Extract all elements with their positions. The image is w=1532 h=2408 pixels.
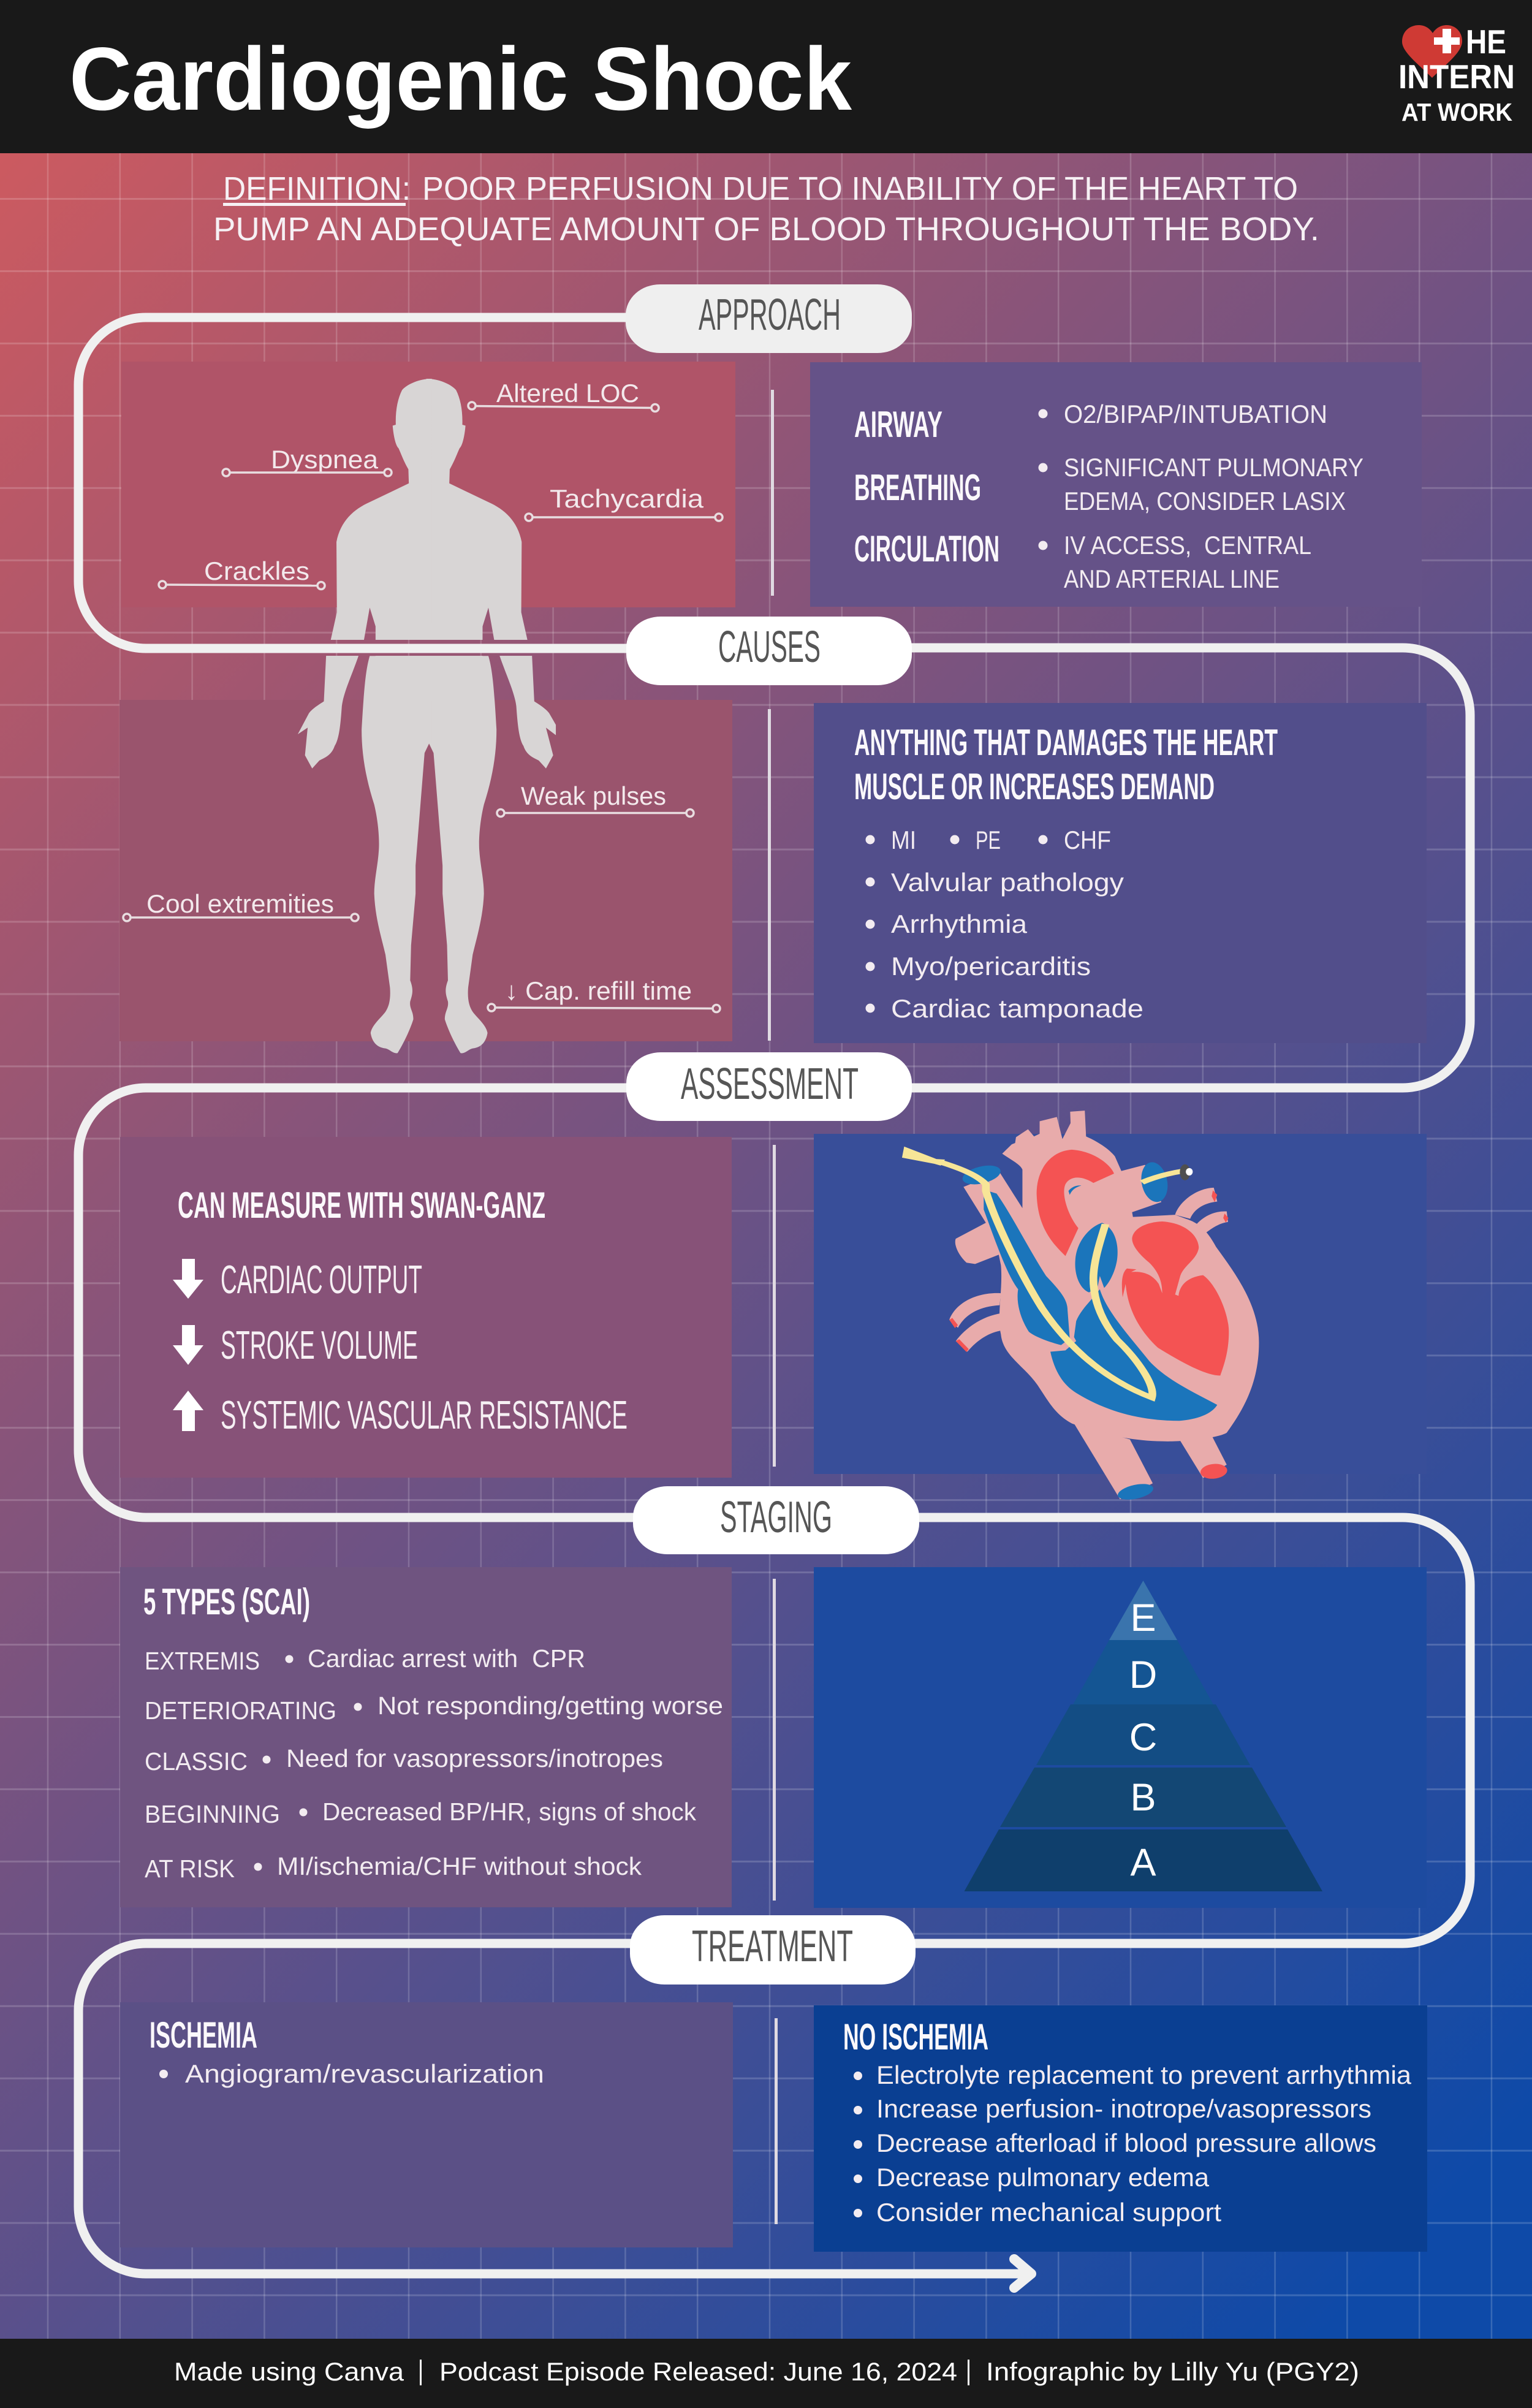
logo: The Intern at Work: HE: [1466, 23, 1506, 61]
text block: swan-ganz assessment: CAN MEASURE WITH SWAN-GANZ: [178, 1185, 545, 1226]
text block: causes list: Cardiac tamponade: [891, 994, 1143, 1023]
panel: assessment text background: [120, 1137, 732, 1478]
heading pill: approach: [626, 284, 912, 353]
text block: SCAI stages: AT RISK: [145, 1855, 235, 1883]
text block: SCAI stages: MI/ischemia/CHF without shock: [277, 1852, 642, 1880]
panel: staging text background: [120, 1567, 732, 1907]
label: Cool extremities: Cool extremities: [146, 889, 334, 918]
text block: causes list: Myo/pericarditis: [891, 952, 1091, 981]
text block: causes list: PE: [976, 826, 1001, 854]
label: Weak pulses: Weak pulses: [521, 781, 666, 810]
panel: assessment heart background: [814, 1134, 1427, 1474]
label: decreased cap refill time: ↓ Cap. refill time: [505, 976, 692, 1005]
pyramid tier C: C: [1129, 1716, 1157, 1759]
heading pill: causes: CAUSES: [718, 623, 821, 672]
text block: no ischemia treatment: [843, 2016, 1412, 2227]
text block: no ischemia treatment: Consider mechanical support: [876, 2198, 1221, 2227]
label: Altered LOC: Altered LOC: [496, 379, 639, 408]
text block: airway breathing circulation: CIRCULATION: [854, 528, 999, 569]
pyramid tier A: A: [1130, 1841, 1156, 1884]
panel: staging pyramid background: [814, 1567, 1427, 1908]
definition text: DEFINITION:: [223, 170, 411, 207]
text block: swan-ganz assessment: SYSTEMIC VASCULAR RESISTANCE: [221, 1392, 628, 1437]
pyramid tier D: D: [1129, 1654, 1157, 1696]
text block: airway breathing circulation: AND ARTERIAL LINE: [1064, 564, 1280, 593]
label: Altered LOC: [468, 379, 659, 412]
text block: no ischemia treatment: Decrease pulmonary edema: [876, 2163, 1210, 2192]
text block: causes list: [854, 722, 1278, 1023]
text block: causes list: Valvular pathology: [891, 868, 1124, 897]
dividers: [771, 390, 774, 596]
heading pill: staging: [633, 1486, 919, 1554]
text block: SCAI stages: 5 TYPES (SCAI): [143, 1581, 310, 1622]
text block: SCAI stages: DETERIORATING: [145, 1696, 336, 1725]
heading pill: approach: APPROACH: [699, 291, 841, 340]
text block: airway breathing circulation: BREATHING: [854, 467, 981, 508]
text block: causes list: MI: [891, 826, 916, 854]
heading pill: causes: [626, 617, 912, 685]
text block: SCAI stages: Cardiac arrest with CPR: [308, 1644, 585, 1673]
text block: airway breathing circulation: SIGNIFICANT PULMONARY: [1064, 453, 1363, 482]
pyramid tier D: [1073, 1640, 1213, 1704]
text block: causes list: MUSCLE OR INCREASES DEMAND: [854, 766, 1215, 807]
panel: approach ABC background: [810, 362, 1422, 607]
panel: treatment no ischemia background: [814, 2005, 1427, 2252]
footer bar: Infographic by Lilly Yu (PGY2): [986, 2357, 1359, 2386]
text block: airway breathing circulation: O2/BIPAP/INTUBATION: [1064, 400, 1327, 428]
icon: human body silhouette: [298, 379, 556, 1053]
illustration: heart with swan-ganz catheter: [902, 1111, 1259, 1503]
text block: airway breathing circulation: AIRWAY: [854, 404, 942, 445]
text block: SCAI stages: EXTREMIS: [145, 1647, 260, 1675]
label: Dyspnea: Dyspnea: [271, 445, 379, 474]
text block: swan-ganz assessment: STROKE VOLUME: [221, 1323, 418, 1367]
pyramid tier B: B: [1130, 1776, 1156, 1819]
icon: up arrow systemic vascular resistance: [173, 1391, 203, 1431]
text block: no ischemia treatment: Electrolyte replacement to prevent arrhythmia: [876, 2060, 1412, 2089]
title: Cardiogenic Shock: [69, 29, 852, 129]
pyramid tier B: [1000, 1768, 1286, 1827]
pyramid tier E: [1109, 1581, 1177, 1640]
label: Crackles: Crackles: [204, 556, 309, 585]
logo: The Intern at Work: [1398, 23, 1515, 126]
footer bar: Podcast Episode Released: June 16, 2024: [439, 2357, 957, 2386]
chart: SCAI staging pyramid: [965, 1581, 1322, 1891]
text block: no ischemia treatment: NO ISCHEMIA: [843, 2016, 988, 2057]
logo: The Intern at Work: AT WORK: [1401, 98, 1512, 126]
panel: causes symptoms background: [119, 700, 732, 1041]
text block: ischemia treatment: [150, 2015, 544, 2088]
label: Tachycardia: [525, 484, 722, 521]
text block: airway breathing circulation: EDEMA, CONSIDER LASIX: [1064, 487, 1346, 515]
text block: ischemia treatment: ISCHEMIA: [150, 2015, 257, 2056]
icon: down arrow cardiac output: [173, 1259, 203, 1299]
header bar: [0, 0, 1532, 153]
label: Dyspnea: [222, 445, 392, 476]
heading pill: staging: STAGING: [720, 1493, 832, 1542]
panel: causes list background: [814, 703, 1427, 1043]
text block: swan-ganz assessment: CARDIAC OUTPUT: [221, 1257, 422, 1302]
label: Crackles: [159, 556, 325, 590]
icon: down arrow stroke volume: [173, 1325, 203, 1365]
label: Tachycardia: Tachycardia: [550, 484, 704, 513]
heading pill: assessment: ASSESSMENT: [681, 1060, 859, 1109]
text block: SCAI stages: Not responding/getting worse: [377, 1692, 723, 1720]
text block: causes list: Arrhythmia: [891, 910, 1028, 938]
logo: The Intern at Work: INTERN: [1398, 58, 1515, 96]
text block: ischemia treatment: Angiogram/revascularization: [185, 2059, 544, 2088]
text block: SCAI stages: BEGINNING: [145, 1800, 280, 1828]
footer bar: Made using Canva: [174, 2357, 404, 2386]
text block: causes list: CHF: [1064, 826, 1111, 854]
text block: SCAI stages: CLASSIC: [145, 1747, 248, 1776]
heading pill: assessment: [626, 1052, 912, 1121]
label: decreased cap refill time: [488, 976, 720, 1012]
text block: no ischemia treatment: Increase perfusion- inotrope/vasopressors: [876, 2094, 1371, 2123]
text block: SCAI stages: Need for vasopressors/inotropes: [286, 1744, 663, 1772]
label: Weak pulses: [497, 781, 694, 816]
pyramid tier A: [965, 1829, 1322, 1891]
text block: no ischemia treatment: Decrease afterload if blood pressure allows: [876, 2129, 1376, 2157]
text block: SCAI stages: Decreased BP/HR, signs of shock: [322, 1798, 696, 1826]
text block: SCAI stages: [143, 1581, 723, 1883]
heading pill: treatment: TREATMENT: [692, 1922, 853, 1971]
flow line connecting the sections: [78, 317, 1470, 2288]
pyramid tier E: E: [1130, 1597, 1156, 1639]
definition text: POOR PERFUSION DUE TO INABILITY OF THE HEART TO: [422, 170, 1298, 207]
definition text: [213, 170, 1319, 248]
text block: airway breathing circulation: IV ACCESS, CENTRAL: [1064, 531, 1311, 560]
heading pill: treatment: [630, 1915, 916, 1985]
text block: airway breathing circulation: [854, 400, 1363, 593]
pyramid tier C: [1036, 1704, 1250, 1765]
panel: treatment ischemia background: [120, 2002, 733, 2247]
footer bar: [0, 2339, 1532, 2408]
text block: swan-ganz assessment: [173, 1185, 628, 1437]
panel: approach symptoms background: [121, 362, 735, 607]
definition text: PUMP AN ADEQUATE AMOUNT OF BLOOD THROUGHOUT THE BODY.: [213, 211, 1319, 248]
